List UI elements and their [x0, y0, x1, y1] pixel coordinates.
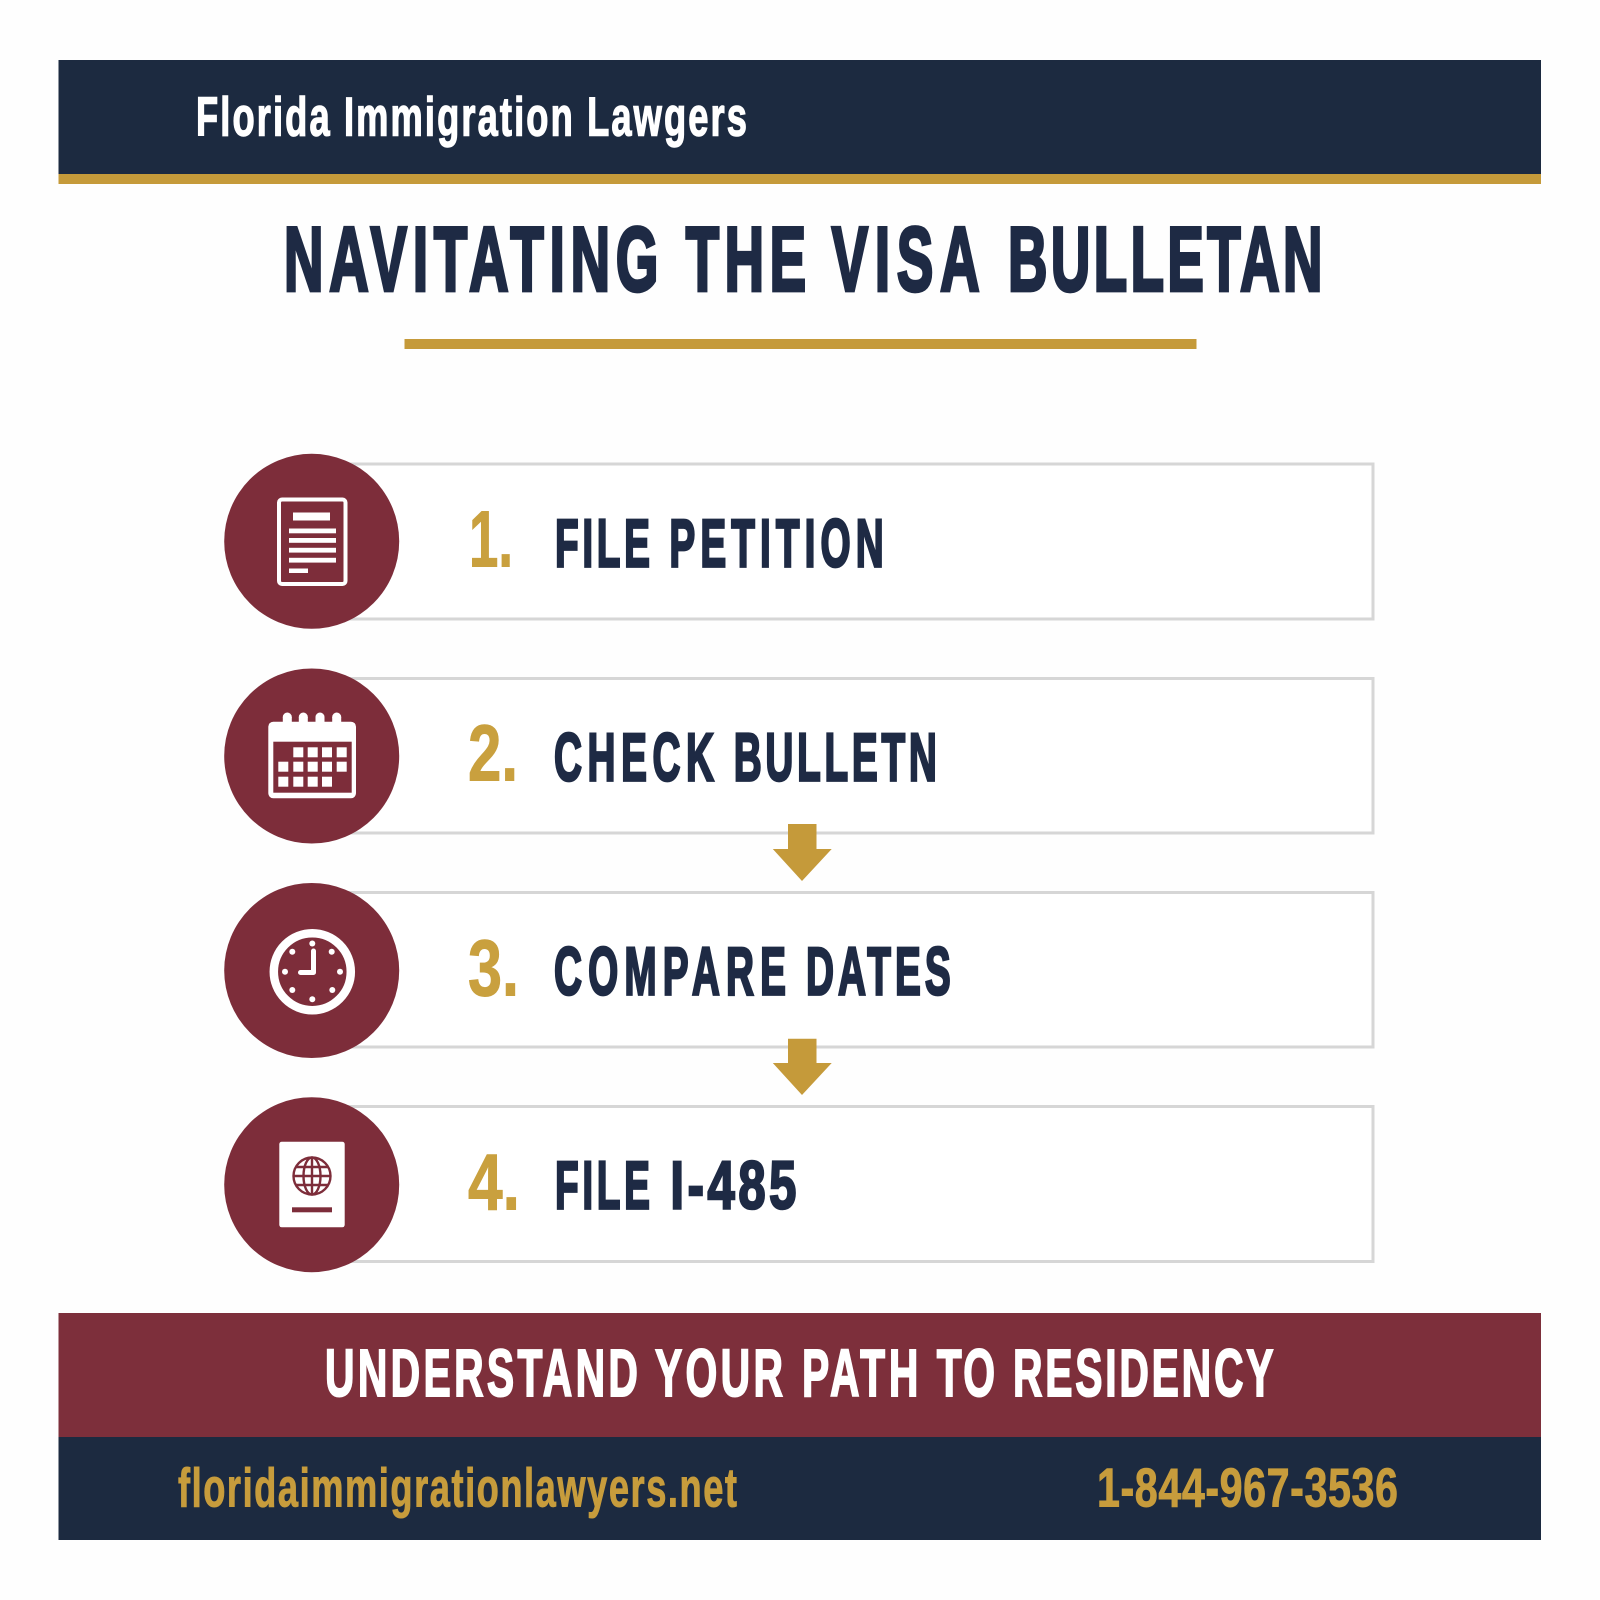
step 4: file I-485: [224, 1097, 1373, 1272]
banner text: [325, 1336, 1273, 1410]
title: THE: [686, 208, 806, 310]
phone number: 1-844-967-3536: [1097, 1458, 1398, 1519]
arrow: step 2 to 3: [773, 824, 832, 881]
website: floridaimmigrationlawyers.net: [178, 1457, 737, 1518]
label: file I-485: [555, 1147, 796, 1223]
step 2: check bulletin: [224, 668, 1373, 844]
firm name: Florida Immigration Lawgers: [196, 86, 747, 147]
label: check bulletin: BULLETN: [734, 719, 937, 795]
label: file I-485: I-485: [670, 1147, 796, 1223]
label: file petition: PETITION: [669, 505, 884, 581]
label: compare dates: COMPARE: [554, 933, 786, 1009]
step 3: compare dates: [224, 883, 1373, 1058]
title: BULLETAN: [1008, 208, 1322, 310]
number 2: 2.: [468, 708, 518, 798]
arrow: step 3 to 4: [773, 1039, 832, 1095]
number 3: 3.: [468, 924, 519, 1012]
label: compare dates: DATES: [806, 933, 951, 1009]
label: file petition: FILE: [555, 505, 650, 581]
number 4: 4.: [468, 1138, 520, 1226]
title: [284, 208, 1322, 310]
banner text: RESIDENCY: [1013, 1336, 1273, 1410]
title underline: [404, 339, 1196, 349]
label: check bulletin: [554, 719, 937, 795]
icon: clock: [274, 933, 351, 1010]
banner text: UNDERSTAND: [325, 1336, 638, 1410]
banner: call to action: [58, 1313, 1541, 1437]
label: file I-485: FILE: [555, 1147, 650, 1223]
label: check bulletin: CHECK: [554, 719, 714, 795]
title: VISA: [832, 208, 980, 310]
number 1: 1.: [469, 494, 513, 584]
step 1: file petition: [224, 454, 1373, 629]
banner text: TO: [937, 1336, 995, 1410]
banner text: PATH: [802, 1336, 918, 1410]
icon: calendar: [268, 712, 356, 798]
icon: passport: [279, 1142, 345, 1227]
header band: [58, 60, 1541, 184]
footer band: [58, 1437, 1541, 1540]
title: NAVITATING: [284, 208, 658, 310]
icon: document: [279, 500, 346, 584]
banner text: YOUR: [655, 1336, 783, 1410]
label: file petition: [555, 505, 884, 581]
label: compare dates: [554, 933, 951, 1009]
